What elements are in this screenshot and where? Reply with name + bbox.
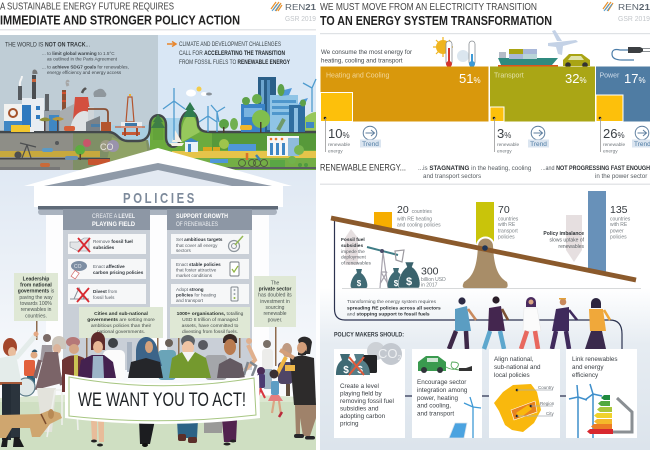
card text: playing field by xyxy=(340,390,383,398)
text: policy imbalance: Policy imbalance xyxy=(543,231,584,237)
card text xyxy=(340,383,394,428)
background people xyxy=(40,334,293,433)
text: fossil fuel subsidies: of renewables xyxy=(341,260,371,266)
text: fossil fuel subsidies: deployment xyxy=(341,254,366,260)
sign: private sector: The xyxy=(271,280,280,286)
text: consume: heating, cooling and transport xyxy=(321,58,403,64)
left title: A SUSTAINABLE ENERGY FUTURE REQUIRES xyxy=(0,2,174,12)
left title xyxy=(0,2,240,28)
bar: transport xyxy=(490,66,595,122)
tractors and tree xyxy=(203,139,229,151)
map labels xyxy=(538,385,555,416)
bar: power: Power xyxy=(600,72,620,80)
text: policy imbalance: slows uptake of xyxy=(550,238,585,244)
solar array xyxy=(210,144,256,163)
policy card: fossil subsidies xyxy=(68,234,146,254)
text: stagnating xyxy=(418,165,532,180)
policy card: fossil subsidies: subsidies xyxy=(93,245,115,250)
card text: sub-national and xyxy=(494,364,541,371)
panel: support growth xyxy=(167,209,252,370)
card text: Link renewables xyxy=(572,356,618,363)
cyclists xyxy=(238,153,268,166)
policy card: divest xyxy=(68,284,146,304)
text: fossil fuel subsidies: impede the xyxy=(341,249,365,255)
map xyxy=(494,384,553,432)
icon: solar panel and turbine xyxy=(449,397,481,438)
policy card: strong: Adopt strong xyxy=(176,287,204,292)
stat: 10 percent xyxy=(324,117,350,154)
text: climate challenges: CLIMATE AND DEVELOPMENT CHALLENGES xyxy=(179,42,281,48)
text: fossil fuel subsidies: subsidies xyxy=(341,243,363,249)
logo: REN21 left: REN 21 xyxy=(285,2,316,12)
stat: 135 countries: countries xyxy=(610,216,631,222)
farm bushes xyxy=(270,145,308,167)
policy card: stable: that foster attractive xyxy=(176,268,217,272)
arrow: fossil subsidies xyxy=(345,229,358,265)
text: scene targets xyxy=(42,51,129,75)
sign: leadership: from national xyxy=(20,282,52,288)
text: climate challenges xyxy=(179,42,290,66)
stat: 300 billion: in 2017 xyxy=(421,282,438,288)
stat: 135 countries: 135 xyxy=(610,204,628,216)
header: CREATE A LEVEL xyxy=(92,213,135,220)
person: woman with raised arm xyxy=(0,332,38,447)
icon: plug xyxy=(612,47,650,60)
heading: not on track: THE WORLD IS NOT ON TRACK... xyxy=(5,42,90,48)
text: not progressing xyxy=(541,165,650,180)
icon: ship xyxy=(498,49,558,67)
icon: trend 2: Trend xyxy=(530,141,547,148)
sign: leadership: governments is xyxy=(18,288,55,294)
sign: leadership xyxy=(14,273,58,321)
text: policy imbalance xyxy=(543,231,585,250)
stat: 135 countries: power xyxy=(610,228,624,234)
card text: integration among xyxy=(417,387,468,394)
text: stagnating: ...is STAGNATING in the heating, cooling xyxy=(418,165,532,172)
fossil sky xyxy=(0,35,158,170)
policy card: stable xyxy=(171,259,249,279)
map labels: Country xyxy=(538,385,555,390)
icon: sun and thermometers xyxy=(433,37,475,67)
icon: trend 1 xyxy=(360,126,381,148)
stat: 3 percent xyxy=(493,117,519,154)
capitals xyxy=(38,209,277,215)
crowd xyxy=(0,320,316,450)
stat: 20 countries xyxy=(397,204,441,228)
sign: private sector: power. xyxy=(268,318,282,324)
connectors xyxy=(405,395,566,397)
icon: money bags crossed: $ xyxy=(343,365,349,376)
card: align policies xyxy=(489,349,560,438)
text: climate challenges: FROM FOSSIL FUELS TO RENEWABLE ENERGY xyxy=(179,60,290,66)
card: sector integration xyxy=(412,349,482,438)
stat: 10 percent: 10% xyxy=(328,126,350,141)
rope xyxy=(334,218,622,350)
heading: policies: POLICIES xyxy=(123,190,197,207)
bar: power policies xyxy=(588,191,606,272)
right title: WE MUST MOVE FROM AN ELECTRICITY TRANSITION xyxy=(320,2,537,13)
stat: 26 percent xyxy=(599,117,625,154)
bar: heating and cooling xyxy=(320,66,488,122)
policy card: targets: sectors xyxy=(176,248,192,253)
card text xyxy=(417,379,468,418)
logo: REN21 right xyxy=(603,2,650,23)
panel: level playing field xyxy=(63,209,150,370)
biomass plant xyxy=(267,119,299,156)
sign: leadership: countries. xyxy=(25,314,47,320)
text: transforming: spreading RE policies across all sectors xyxy=(347,306,441,312)
sign: organisations: divesting from fossil fuels. xyxy=(182,329,238,335)
icon: money bags crossed: $ xyxy=(357,365,363,376)
ground line xyxy=(342,287,641,290)
text: not progressing: in the power sector xyxy=(595,173,647,180)
ground xyxy=(0,398,316,450)
person: woman purple jacket xyxy=(78,332,116,446)
sailing boat xyxy=(170,130,184,146)
fossil factories xyxy=(4,71,111,131)
trees underground xyxy=(75,139,91,160)
fulcrum xyxy=(463,239,508,288)
card text: removing fossil fuel xyxy=(340,398,394,405)
stat: 300 billion xyxy=(421,266,446,288)
heading: renewable energy: RENEWABLE ENERGY... xyxy=(320,162,406,172)
fossil road band xyxy=(0,151,100,157)
stat: 300 billion: billion USD xyxy=(421,277,446,283)
panel: temple of policies xyxy=(24,148,292,379)
oil rig xyxy=(115,94,145,136)
stat: 135 countries: policies xyxy=(610,234,627,240)
logo: REN21 left: GSR 2019 xyxy=(285,14,316,23)
icon: money bags crossed xyxy=(336,354,370,376)
logo: REN21 right: REN 21 xyxy=(618,2,650,12)
text: transforming: and stopping support to fossil fuels xyxy=(347,312,430,318)
text: transforming: Transforming the energy system requires xyxy=(347,299,437,305)
text: scene targets: ... to achieve SDG7 goals for renewables, xyxy=(42,64,129,70)
policy card: divest: Divest from xyxy=(93,289,117,294)
sign: private sector: private sector xyxy=(259,286,291,292)
bar: power: 17% xyxy=(624,71,646,86)
stat: 135 countries xyxy=(610,204,631,240)
icon: electric car xyxy=(418,356,472,373)
card text: subsidies and xyxy=(340,406,379,412)
house on field xyxy=(184,138,199,152)
policy card: strong: policies for heating xyxy=(176,292,217,298)
policy card: targets: Set ambitious targets xyxy=(176,237,223,242)
policy card: strong: and transport xyxy=(176,298,204,303)
icon: money bags: $ xyxy=(394,279,399,288)
bar: heating and cooling: 51% xyxy=(459,71,481,86)
panel: support growth: OF RENEWABLES xyxy=(176,221,218,228)
person 2 xyxy=(484,296,508,349)
sign: private sector: has doubled its xyxy=(258,292,292,298)
stat: 3 percent: 3% xyxy=(497,126,511,141)
stat: 3 percent: renewable xyxy=(497,142,519,148)
policy card: stable: Enact stable policies xyxy=(176,262,221,267)
sign: organisations: USD 8 trillion of managed xyxy=(182,317,238,323)
text: stagnating: and transport sectors xyxy=(423,173,481,180)
right title: TO AN ENERGY SYSTEM TRANSFORMATION xyxy=(320,13,552,28)
smog cloud xyxy=(93,89,106,97)
children xyxy=(257,367,283,417)
card text: efficiency xyxy=(572,372,599,379)
card text xyxy=(494,356,541,379)
arrow: orange xyxy=(167,42,176,46)
pediment xyxy=(24,148,292,186)
sign: leadership: towards 100% xyxy=(20,301,52,307)
icon: car xyxy=(563,54,590,68)
renewable ground xyxy=(150,111,316,170)
small cars xyxy=(40,156,110,167)
co2 cloud xyxy=(100,140,119,152)
person: man with turban xyxy=(62,337,84,392)
sign: cities and sub-national: national governments. xyxy=(97,329,145,335)
stat: 10 percent: renewable xyxy=(328,142,350,148)
sign: private sector xyxy=(254,276,296,327)
dog xyxy=(0,409,62,438)
mid ground xyxy=(73,133,155,170)
seesaw xyxy=(331,191,641,350)
policy card: strong xyxy=(171,284,249,304)
icon: money bags: $ xyxy=(406,276,412,288)
policy card: divest: fossil fuels xyxy=(93,295,115,300)
person 1 xyxy=(449,297,476,349)
stat: 70 countries: transport xyxy=(498,228,518,234)
icon: plane xyxy=(548,30,578,55)
pipeline road xyxy=(0,112,316,147)
card text: Create a level xyxy=(340,383,379,390)
card text: and cooling, xyxy=(417,402,451,410)
sign: organisations: assets, have committed to xyxy=(182,323,239,329)
icon: co2 cloud: CO xyxy=(378,346,398,361)
right title xyxy=(320,2,552,28)
sign: private sector: renewable xyxy=(263,311,287,317)
stat: 300 billion: 300 xyxy=(421,266,439,278)
person 4 xyxy=(552,298,577,349)
map labels: City xyxy=(546,411,554,416)
text: scene targets: as outlined in the Paris Agreement xyxy=(47,56,118,62)
card text: and transport xyxy=(417,410,454,418)
text: policy imbalance: renewables xyxy=(558,244,584,250)
card text: local policies xyxy=(494,372,530,379)
person: woman with blue hijab xyxy=(128,337,163,447)
card text: pricing xyxy=(340,420,359,428)
people pulling rope xyxy=(449,296,610,349)
sea right xyxy=(160,118,192,150)
icon: trend 1: Trend xyxy=(362,141,379,148)
stat: 20 countries: 20 countries xyxy=(397,204,432,216)
sign: cities and sub-national: governments are setting more xyxy=(87,317,155,323)
heading: policy makers should: POLICY MAKERS SHOULD: xyxy=(334,332,404,338)
stat: 70 countries: with RE xyxy=(498,222,516,228)
policy card: carbon pricing xyxy=(68,259,146,279)
card: link efficiency xyxy=(566,349,637,438)
sign: organisations: 1000+ organisations, totalling xyxy=(177,311,244,317)
card text: Encourage sector xyxy=(417,379,466,386)
bar: transport policies xyxy=(476,202,494,248)
sea left xyxy=(112,125,152,145)
banner xyxy=(65,374,260,424)
green city buildings xyxy=(241,77,314,132)
card: level playing field xyxy=(334,342,405,438)
scene: fossil versus renewable city xyxy=(0,35,316,170)
stat: 26 percent: 26% xyxy=(603,126,625,141)
icon: turbines xyxy=(569,384,602,438)
stat: 26 percent: renewable xyxy=(603,142,625,148)
sign: cities and sub-national: ambitious policies than their xyxy=(91,323,152,329)
policy card: stable: market conditions xyxy=(176,273,213,278)
sign posts xyxy=(36,320,276,366)
arch fir tree xyxy=(183,102,197,117)
stat: 70 countries: countries xyxy=(498,216,519,222)
co2 cloud: CO xyxy=(100,142,114,152)
arrow: policy imbalance xyxy=(566,215,582,262)
beam xyxy=(331,218,636,280)
sign: leadership: renewables in xyxy=(21,307,52,313)
text: transforming xyxy=(347,299,441,318)
left title: IMMEDIATE AND STRONGER POLICY ACTION xyxy=(0,12,240,28)
sign: private sector: sourcing xyxy=(266,305,285,311)
fossil ground xyxy=(0,132,150,170)
icon: co2 cloud xyxy=(367,342,402,365)
sign: organisations xyxy=(170,307,250,338)
icon: trend 3 xyxy=(632,126,650,148)
card text: Align national, xyxy=(494,356,534,363)
sign: cities and sub-national: Cities and sub-national xyxy=(94,311,149,317)
stat: 70 countries: policies xyxy=(498,234,515,240)
clouds and sun xyxy=(186,86,212,96)
person: wheelchair user xyxy=(17,350,38,396)
icon: money bags xyxy=(351,262,420,288)
text: scene targets: energy efficiency and energy access xyxy=(47,70,122,75)
icon: trend 2 xyxy=(528,126,549,148)
panel: background below scene xyxy=(0,165,316,450)
text: scene targets: ... to limit global warming to 1.5°C xyxy=(42,51,115,56)
sign: private sector: investment in xyxy=(260,299,290,305)
wind turbines xyxy=(163,79,316,140)
blue car xyxy=(42,148,53,152)
card text: and energy xyxy=(572,364,604,371)
icon: oil derrick xyxy=(367,247,404,288)
person 3 xyxy=(521,297,541,349)
banner slogan: WE WANT YOU TO ACT! xyxy=(78,390,246,411)
policy card: targets: that cover all energy xyxy=(176,243,218,248)
pump jack xyxy=(15,143,36,158)
columns xyxy=(46,209,269,379)
stat: 26 percent: energy xyxy=(603,148,618,154)
stat: 70 countries xyxy=(498,204,519,240)
map labels: Region xyxy=(540,401,555,406)
panel: lower right background xyxy=(320,288,650,450)
panel: level playing field: PLAYING FIELD xyxy=(92,221,135,228)
card text: power, heating xyxy=(417,395,458,402)
policy card: fossil subsidies: Remove fossil fuel xyxy=(93,239,133,244)
icon: house outline xyxy=(600,398,632,432)
pivot xyxy=(482,245,488,251)
person: man green jacket xyxy=(169,335,211,443)
architrave xyxy=(34,186,283,207)
card text xyxy=(572,356,618,379)
sky-side hill xyxy=(298,112,316,132)
bar: power xyxy=(596,66,650,122)
bar: transport: Transport xyxy=(494,72,524,80)
person: older woman with walker xyxy=(35,336,78,437)
policy card: carbon pricing: carbon pricing policies xyxy=(93,270,144,275)
header: SUPPORT GROWTH xyxy=(176,213,228,220)
stat: 135 countries: with RE xyxy=(610,222,628,228)
city trees xyxy=(219,110,270,133)
person: man in black t-shirt xyxy=(280,337,316,440)
yellow taxi xyxy=(240,125,252,130)
left fir tree xyxy=(151,114,165,128)
person: woman grey top xyxy=(217,334,245,446)
text: consume xyxy=(321,49,412,64)
card text: adopting carbon xyxy=(340,413,386,420)
text: consume: We consume the most energy for xyxy=(321,49,412,56)
text: fossil fuel subsidies: Fossil fuel xyxy=(341,237,365,243)
stat: 20 countries: and cooling policies xyxy=(397,222,441,228)
yellow truck xyxy=(11,125,34,132)
icon: barrel xyxy=(363,355,377,373)
policy card: carbon pricing: CO xyxy=(74,264,82,270)
policy card: carbon pricing: Enact affective xyxy=(93,264,125,269)
stat: 3 percent: energy xyxy=(497,148,512,154)
sign: leadership: Leadership xyxy=(23,276,49,282)
text: fossil fuel subsidies xyxy=(341,237,371,266)
sign: cities and sub-national xyxy=(79,307,163,338)
acacia trees xyxy=(39,117,64,131)
underground smoke xyxy=(55,141,59,145)
sign: leadership: paving the way xyxy=(19,295,53,301)
red car xyxy=(64,126,75,131)
text: climate challenges: CALL FOR ACCELERATING THE TRANSITION xyxy=(179,51,285,57)
stat: 10 percent: energy xyxy=(328,148,343,154)
person 5 xyxy=(585,298,610,349)
stat: 20 countries: with RE heating xyxy=(397,216,432,222)
policy card: targets xyxy=(171,234,249,254)
icon: money bags: $ xyxy=(357,279,362,288)
bar: heating and cooling: Heating and Cooling xyxy=(326,72,390,80)
icon: co2 cloud: 2 xyxy=(398,355,402,362)
logo: REN21 left xyxy=(271,2,316,23)
renewable sky xyxy=(158,35,316,170)
energy rating chart xyxy=(587,395,613,434)
stat: 70 countries: 70 xyxy=(498,204,510,216)
bar: transport: 32% xyxy=(565,71,587,86)
bar: heating policies xyxy=(374,212,392,231)
